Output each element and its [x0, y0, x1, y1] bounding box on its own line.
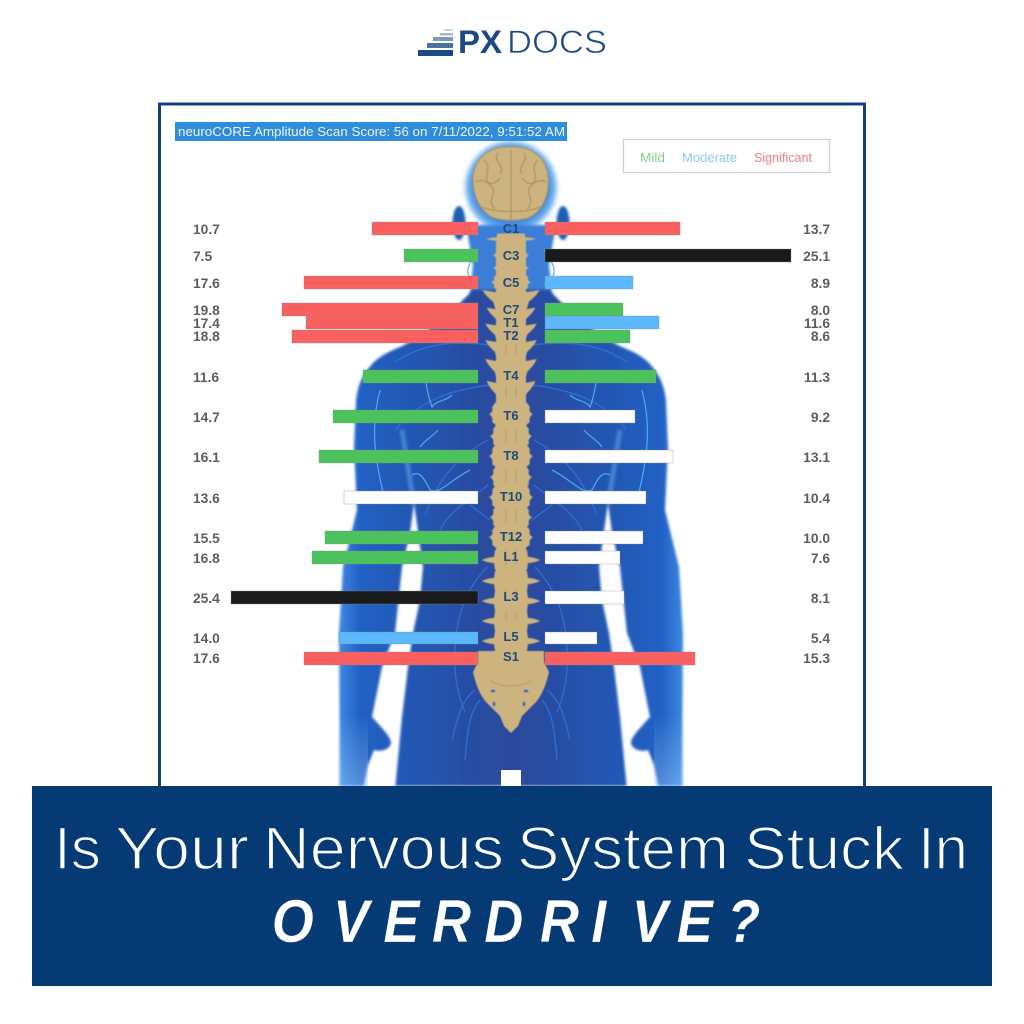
values: left column: 14.7	[193, 410, 220, 425]
head halo	[465, 141, 557, 233]
values: left column: 16.8	[193, 551, 220, 566]
vertebra labels: L3	[503, 589, 519, 604]
values: right column: 8.6	[811, 329, 830, 344]
values: left column: 17.6	[193, 276, 220, 291]
values: right column: 13.7	[803, 222, 830, 237]
values: right column: 8.9	[811, 276, 830, 291]
legend: Mild	[640, 150, 665, 165]
values: left column: 13.6	[193, 491, 220, 506]
values: right column: 5.4	[811, 631, 830, 646]
nerves: bright	[375, 250, 647, 500]
logo wordmark: PX	[458, 24, 503, 60]
title line 1: Your	[115, 815, 249, 882]
forearm fade: right	[654, 715, 684, 786]
values: left column: 17.6	[193, 651, 220, 666]
bars: right side	[545, 222, 791, 665]
icon: stair bars	[418, 29, 453, 56]
panel: spine scan chart	[160, 104, 864, 804]
legend: Moderate	[682, 150, 737, 165]
neck	[466, 225, 556, 295]
values: right column: 10.4	[803, 491, 830, 506]
values: left column: 25.4	[193, 591, 220, 606]
title line 2: OVERDRIVE?	[272, 888, 760, 956]
spine	[473, 234, 549, 733]
title line 1: In	[918, 815, 968, 882]
values: left column: 7.5	[193, 249, 213, 264]
legend: Significant	[754, 150, 812, 165]
values: left column: 10.7	[193, 222, 220, 237]
bars: left side	[231, 222, 478, 665]
values: left column: 16.1	[193, 450, 220, 465]
title line 1: Nervous	[263, 815, 504, 882]
values: left column: 18.8	[193, 329, 220, 344]
values: right column: 7.6	[811, 551, 830, 566]
title line 1	[54, 815, 968, 882]
vertebra labels: T2	[503, 328, 519, 343]
ears	[452, 206, 570, 240]
values: left column	[193, 222, 220, 666]
light bands beside torso	[402, 430, 620, 505]
vertebra labels: C3	[503, 248, 519, 263]
title banner	[32, 786, 992, 986]
vertebra labels: T4	[503, 368, 519, 383]
vertebra labels: C5	[503, 275, 519, 290]
values: right column: 15.3	[803, 651, 830, 666]
legend	[624, 140, 830, 172]
values: left column: 11.6	[193, 370, 219, 385]
values: right column: 8.1	[811, 591, 830, 606]
values: right column: 11.3	[804, 370, 830, 385]
scan score heading	[175, 122, 567, 141]
panel frame	[160, 104, 864, 804]
vertebra labels: T8	[503, 448, 519, 463]
values: left column: 19.8	[193, 303, 220, 318]
values: left column: 17.4	[193, 316, 220, 331]
logo: PX Docs	[418, 24, 607, 60]
sacrum	[473, 651, 549, 733]
vertebra labels: C7	[503, 302, 519, 317]
vertebra labels: T6	[503, 408, 519, 423]
brain	[473, 147, 548, 220]
nerves: deep	[395, 343, 627, 760]
values: right column: 8.0	[811, 303, 830, 318]
body illustration	[338, 141, 684, 790]
sacral foramina	[490, 690, 528, 706]
arm gap: left	[363, 503, 423, 790]
vertebra labels: T1	[503, 315, 519, 330]
body silhouette	[339, 290, 683, 786]
vertebra labels: C1	[503, 221, 519, 236]
title line 1: Stuck	[744, 815, 905, 882]
logo: PX Docs: DOCS	[507, 24, 607, 60]
vertebra labels: L1	[503, 549, 519, 564]
values: right column: 9.2	[811, 410, 830, 425]
arm gap: right	[599, 503, 659, 790]
values: left column: 14.0	[193, 631, 220, 646]
forearm fade: left	[338, 715, 368, 786]
values: right column: 25.1	[803, 249, 830, 264]
values: right column	[803, 222, 830, 666]
vertebra labels: S1	[503, 649, 519, 664]
title line 1: System	[517, 815, 729, 882]
vertebra labels: L5	[503, 629, 519, 644]
vertebra labels: T12	[500, 529, 522, 544]
values: right column: 10.0	[803, 531, 830, 546]
vertebra labels	[500, 221, 522, 664]
values: left column: 15.5	[193, 531, 220, 546]
values: right column: 11.6	[804, 316, 830, 331]
vertebra labels: T10	[500, 489, 522, 504]
spine shading	[490, 345, 532, 686]
title line 1: Is	[54, 815, 101, 882]
values: right column: 13.1	[803, 450, 830, 465]
gap between legs	[501, 770, 521, 786]
scan score heading: neuroCORE Amplitude Scan Score: 56 on 7/11/2022, 9:51:52 AM	[178, 125, 565, 139]
